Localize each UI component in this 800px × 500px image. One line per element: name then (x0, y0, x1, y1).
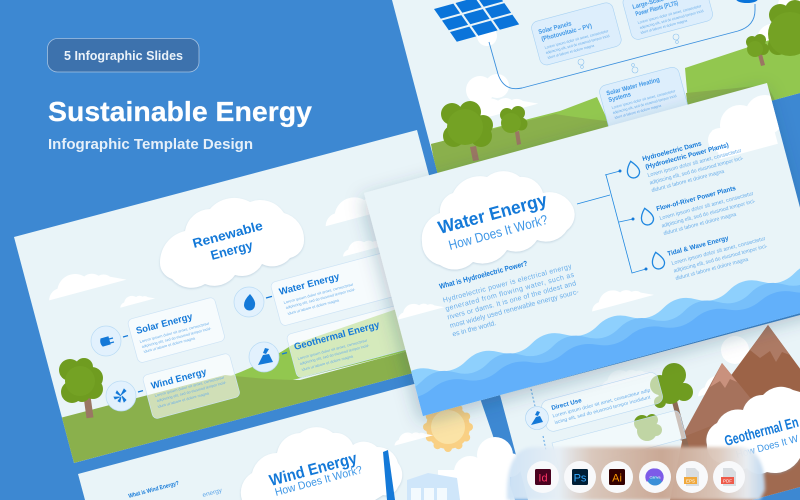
card: large-scale solar power plants: Lorem ipsum dolor sit amet, consectetur (637, 4, 703, 25)
item: tidal and wave energy: Lorem ipsum dolor sit amet, consectetur (671, 236, 766, 267)
panel: renewable energy slide (14, 130, 429, 463)
small mountain (680, 363, 750, 440)
item: hydroelectric dams: didunt ut labore et dolore magna (651, 169, 725, 194)
card: solar panels: idunt ut labore et dolore magna (547, 43, 595, 60)
card: direct use: iscing elit, sed do eiusmod tempor incididunt (554, 394, 652, 426)
heading: renewable energy: Renewable (191, 218, 264, 251)
icon: drop 1 (625, 160, 641, 179)
connector dots (618, 170, 648, 270)
card: solar panels (530, 1, 623, 66)
card: water energy: Water Energy (278, 271, 341, 298)
brown ground (670, 426, 800, 500)
ground (62, 352, 412, 463)
dashed connector (530, 385, 546, 450)
background clouds (398, 304, 444, 320)
icon: eps file (676, 461, 708, 493)
tree (672, 401, 689, 448)
card: geothermal energy: Geothermal Energy (293, 319, 381, 353)
card: solar water heating systems: idunt ut labore et dolore magna (614, 103, 662, 120)
panel: water energy slide (364, 83, 800, 432)
card: wind energy (142, 353, 241, 419)
item: flow-of-river power plants: adipiscing elit, sed do eiusmod tempor inci- (661, 198, 756, 229)
waves (411, 268, 800, 416)
heading: renewable energy: Energy (209, 237, 255, 263)
item: hydroelectric dams: Hydroelectric Dams (642, 140, 703, 163)
title: Sustainable Energy (48, 96, 312, 127)
text: what is hydroelectric power: Hydroelectric power is electrical energy (442, 263, 573, 304)
item: hydroelectric dams: Lorem ipsum dolor sit amet, consectetur (647, 148, 742, 179)
background clouds (598, 336, 760, 396)
icon: photoshop: Ps (574, 472, 587, 484)
tree (59, 358, 103, 418)
card: large-scale solar power plants: idunt ut labore et dolore magna (640, 18, 688, 35)
item: hydroelectric dams (642, 140, 744, 194)
card: direct use: Direct Use (551, 397, 583, 412)
text: what is wind energy: What is Wind Energy? (128, 481, 180, 500)
connectors (123, 296, 287, 392)
title cloud (160, 198, 304, 288)
icon: illustrator: Ai (612, 472, 622, 484)
icon: wind turbine (106, 381, 136, 411)
text: what is hydroelectric power: What is Hydroelectric Power? (438, 259, 529, 291)
icon: building (407, 473, 460, 500)
card: water energy: Lorem ipsum dolor sit amet, consectetur (283, 282, 355, 305)
icon: plug (91, 326, 121, 356)
item: flow-of-river power plants (656, 185, 756, 237)
icon: pdf file: PDF (723, 478, 732, 484)
icon: pdf file (713, 461, 745, 493)
hill (231, 310, 406, 380)
icon: water drop (234, 287, 264, 317)
panel: solar energy slide (392, 0, 800, 173)
item: flow-of-river power plants: Lorem ipsum dolor sit amet, consectetur (659, 191, 754, 222)
icon: sun (423, 402, 473, 452)
card: water energy: idunt ut labore et dolore magna (287, 298, 340, 316)
clouds (392, 426, 522, 500)
card: solar panels: Solar Panels (538, 20, 573, 36)
text: what is hydroelectric power (438, 259, 580, 338)
connector line (489, 4, 755, 89)
background clouds (460, 0, 800, 123)
panel: wind energy slide (78, 369, 522, 500)
icon: photoshop (564, 461, 596, 493)
item: flow-of-river power plants: Flow-of-River Power Plants (656, 185, 737, 213)
item: tidal and wave energy: Tidal & Wave Energy (667, 235, 730, 258)
item: tidal and wave energy: didunt ut labore et dolore magna (675, 257, 749, 282)
card: solar panels: adipiscing elit, sed do eiusmod tempor incid (545, 34, 610, 55)
card: geothermal energy (286, 303, 418, 378)
text: what is wind energy (128, 481, 223, 500)
icon: turbine tower (383, 450, 395, 500)
card: solar energy: idunt ut labore et dolore magna (143, 336, 196, 354)
subtitle: Infographic Template Design (48, 136, 253, 153)
text: what is wind energy: energy (202, 488, 223, 499)
card: water energy (270, 251, 402, 326)
heading: wind energy: How Does It Work? (274, 464, 364, 499)
trees (441, 0, 800, 161)
card: solar energy (127, 297, 226, 363)
hills (431, 97, 607, 172)
card: solar energy: adipiscing elit, sed do eiusmod tempor incid- (141, 326, 213, 349)
icon: indesign (527, 461, 559, 493)
small tree (634, 414, 662, 441)
item: tidal and wave energy: adipiscing elit, sed do eiusmod tempor inci- (673, 243, 768, 274)
heading: water energy: Water Energy (436, 190, 549, 238)
heading: water energy: How Does It Work? (447, 212, 549, 253)
icon: indesign: Id (538, 472, 548, 484)
text: what is hydroelectric power: most widely used renewable energy sourc- (449, 289, 580, 330)
card: solar panels: (Photovoltaic – PV) (541, 23, 593, 43)
item: flow-of-river power plants: didunt ut labore et dolore magna (663, 212, 737, 237)
card: wind energy: Lorem ipsum dolor sit amet, consectetur (154, 375, 226, 398)
cloud (241, 427, 402, 500)
card: large-scale solar power plants: adipiscing elit, sed do eiusmod tempor incid (639, 9, 704, 30)
card: solar energy: Lorem ipsum dolor sit amet, consectetur (139, 321, 211, 344)
text: what is hydroelectric power: es in the world. (452, 320, 497, 338)
card: solar energy: Solar Energy (135, 311, 194, 337)
card: solar panels: Lorem ipsum dolor sit amet, consectetur (544, 29, 610, 50)
heading: wind energy: Wind Energy (268, 450, 359, 490)
icon: canva (639, 461, 671, 493)
icon: illustrator (601, 461, 633, 493)
card: solar water heating systems: Systems (608, 91, 632, 104)
badge: 5 infographic slides (48, 38, 199, 72)
card: solar water heating systems (598, 66, 690, 135)
badge: 5 infographic slides: 5 Infographic Slides (64, 49, 183, 63)
connector dots (578, 34, 679, 73)
icon: geothermal (249, 342, 279, 372)
card: wind energy: idunt ut labore et dolore magna (157, 391, 210, 409)
geothermal cloud (706, 387, 800, 474)
card: wind energy: Wind Energy (150, 366, 209, 392)
title cloud (422, 171, 575, 270)
card: geothermal energy: idunt ut labore et dolore magna (301, 354, 354, 372)
icon: direct use (526, 406, 548, 430)
card: solar water heating systems: Lorem ipsum dolor sit amet, consectetur (611, 89, 677, 110)
top node (736, 0, 758, 3)
heading: renewable energy (191, 218, 264, 263)
item: hydroelectric dams: (Hydroelectric Power Plants) (645, 142, 730, 171)
card: direct use (540, 371, 664, 433)
panel: file format pill (507, 447, 765, 500)
panel: geothermal energy slide (500, 315, 800, 500)
card: water energy: adipiscing elit, sed do eiusmod tempor incid- (285, 287, 357, 310)
card: large-scale solar power plants (621, 0, 714, 41)
card: solar water heating systems: Solar Water Heating (606, 76, 661, 97)
icon: eps file: EPS (686, 478, 695, 484)
icon: drop 2 (639, 207, 655, 226)
big mountain (732, 325, 800, 399)
card: solar water heating systems: adipiscing elit, sed do eiusmod tempor incid (612, 94, 677, 115)
icon: drop 3 (650, 251, 666, 270)
icon: canva: Canva (650, 476, 661, 480)
item: hydroelectric dams: adipiscing elit, sed do eiusmod tempor inci- (649, 155, 744, 186)
connector lines (577, 171, 646, 273)
card: heat pumps (552, 410, 686, 448)
item: tidal and wave energy (667, 235, 768, 282)
card: wind energy: adipiscing elit, sed do eiusmod tempor incid- (156, 380, 228, 403)
card: geothermal energy: Lorem ipsum dolor sit amet, consectetur (297, 338, 369, 361)
text: what is hydroelectric power: rivers or dams. It is one of the oldest and (447, 280, 577, 321)
icon: solar panel (434, 0, 519, 42)
card: direct use: Lorem ipsum dolor sit amet, consectetur adip (552, 387, 651, 419)
text: what is hydroelectric power: generated from flowing water, such as (445, 272, 575, 313)
card: geothermal energy: adipiscing elit, sed do eiusmod tempor incid- (299, 343, 371, 366)
